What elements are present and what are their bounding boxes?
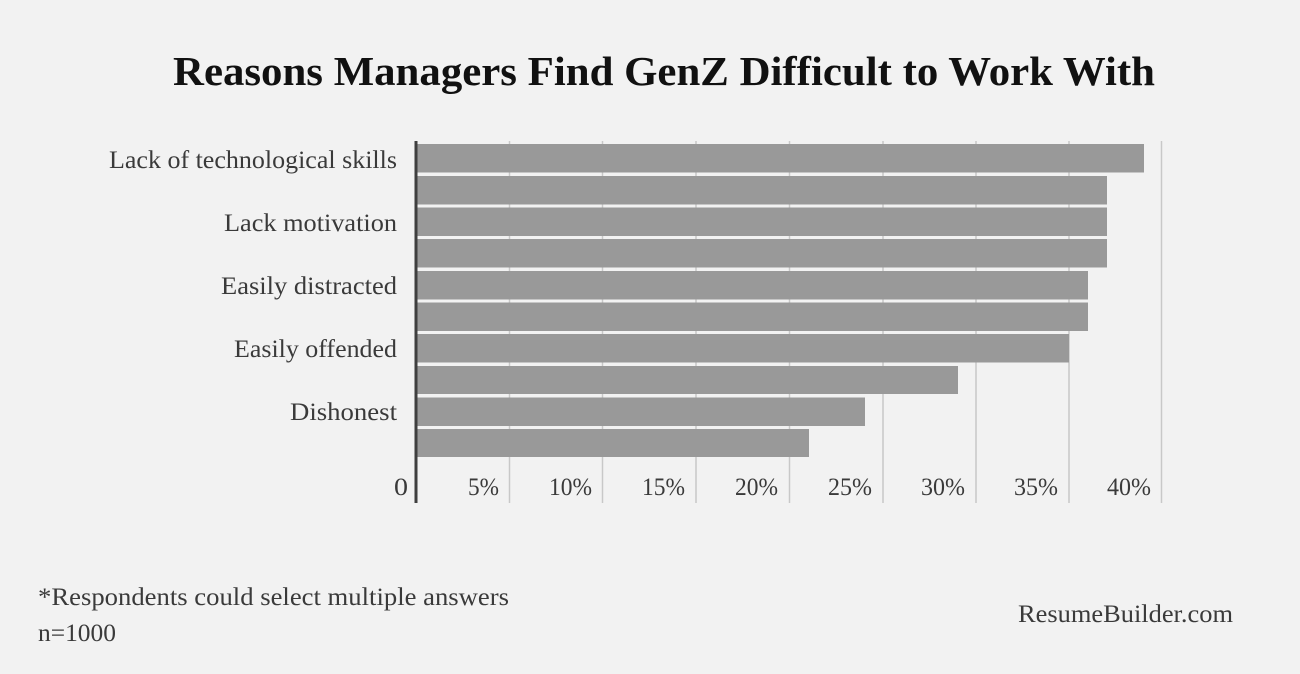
bars (416, 144, 1144, 457)
value axis labels: 30% (921, 474, 965, 501)
category labels: Lack of technological skills (109, 147, 397, 174)
footnote (38, 584, 509, 647)
value axis labels: 25% (828, 474, 872, 501)
category labels: Easily distracted (221, 273, 398, 300)
axis line (414, 141, 418, 503)
category labels: Easily offended (234, 336, 398, 363)
category labels (109, 147, 398, 426)
source credit: ResumeBuilder.com (1018, 601, 1234, 628)
value axis labels: 5% (468, 474, 499, 501)
category labels: Lack motivation (224, 210, 398, 237)
value axis labels: 0 (394, 474, 408, 501)
value axis labels: 10% (549, 474, 592, 501)
value axis labels: 15% (642, 474, 685, 501)
footnote: n=1000 (38, 620, 116, 647)
title: Reasons Managers Find GenZ Difficult to Work With (173, 48, 1155, 94)
value axis labels (394, 474, 1151, 501)
footnote: *Respondents could select multiple answers (38, 584, 509, 611)
value axis labels: 35% (1014, 474, 1058, 501)
category labels: Dishonest (290, 399, 397, 426)
value axis labels: 40% (1107, 474, 1151, 501)
bar chart (109, 141, 1162, 503)
value axis labels: 20% (735, 474, 778, 501)
